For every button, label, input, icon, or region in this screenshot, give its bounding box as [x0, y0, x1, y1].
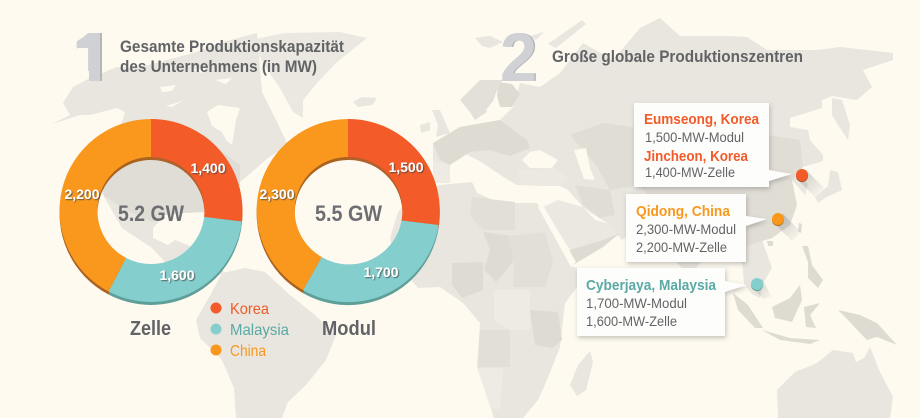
Iberia: [433, 160, 450, 183]
segment: China: [257, 119, 348, 290]
callout: Malaysia: Cyberjaya, Malaysia: [586, 277, 717, 294]
callout: China: Qidong, China: [636, 203, 731, 220]
Yemen and Oman: [570, 233, 620, 265]
donut total: 5.5 GW: 5.5 GW: [315, 201, 382, 226]
Hudson Bay: [207, 105, 240, 145]
Philippines: [802, 246, 823, 288]
Iran: [575, 185, 615, 218]
value labels: 1,500: [388, 159, 424, 175]
East Asia: [640, 135, 803, 248]
Baltic Sea: [486, 96, 508, 118]
Borneo: [772, 285, 802, 322]
value labels: 1,400: [190, 160, 226, 176]
Australia: [777, 347, 893, 418]
value labels: [259, 159, 424, 280]
Sulawesi: [804, 303, 820, 328]
marker: China: [772, 213, 801, 241]
value labels: 1,600: [159, 267, 195, 283]
Ireland: [420, 122, 430, 133]
section 2 heading: Große globale Produktionszentren: [552, 48, 803, 66]
Japan: [815, 170, 842, 203]
callout: Korea: Jincheon, Korea: [644, 148, 749, 165]
Kamchatka: [832, 98, 850, 140]
Black Sea: [522, 150, 558, 168]
callout: Malaysia: 1,600-MW-Zelle: [586, 313, 677, 329]
Greenland: [250, 32, 367, 118]
United States: [100, 140, 240, 222]
Red Sea: [538, 207, 576, 267]
callout: Malaysia: 1,700-MW-Modul: [586, 295, 687, 311]
donut total: 5.2 GW: 5.2 GW: [118, 201, 184, 226]
callout: Korea: 1,400-MW-Zelle: [645, 164, 735, 180]
Turkey: [517, 168, 568, 186]
segment: Korea: [151, 119, 242, 222]
callout: Malaysia: [577, 268, 747, 336]
marker: Korea: [796, 169, 824, 197]
segment: Malaysia: [108, 217, 242, 302]
section 2 numeral: 2: [500, 19, 537, 96]
legend: [210, 301, 289, 360]
Madagascar: [570, 351, 593, 396]
North America: [52, 33, 288, 280]
label: Zelle: Zelle: [130, 318, 171, 340]
donut chart: Modul: [257, 119, 440, 305]
Russia lighter band removed; Arabia: [543, 200, 620, 265]
Eurasia: [433, 18, 893, 298]
marker: Malaysia: [751, 278, 772, 299]
New Guinea: [838, 310, 897, 345]
Europe countries: [433, 120, 530, 165]
segment: Korea: [348, 119, 440, 225]
callout: China: 2,200-MW-Zelle: [636, 239, 727, 255]
value labels: 2,200: [64, 186, 100, 202]
legend item: China: China: [230, 343, 266, 360]
Africa: [390, 182, 590, 418]
Africa countries: [483, 232, 513, 282]
Taiwan: [798, 223, 802, 233]
Java: [762, 330, 820, 344]
legend item: Malaysia: Malaysia: [230, 322, 289, 339]
label: Modul: Modul: [322, 318, 376, 340]
segment: China: [60, 119, 151, 292]
donut chart: Zelle: [60, 119, 242, 305]
section 1 heading: [120, 38, 344, 76]
British Isles: [432, 110, 450, 137]
callout: Korea: 1,500-MW-Modul: [645, 129, 744, 145]
callout: Korea: Eumseong, Korea: [644, 111, 760, 128]
section 1 heading: des Unternehmens (in MW): [120, 58, 317, 76]
segment: Malaysia: [303, 220, 439, 302]
Iceland: [353, 97, 377, 107]
Svalbard: [475, 36, 503, 48]
value labels: 2,300: [259, 186, 295, 202]
section 1 numeral: 1: [72, 19, 110, 96]
Arctic channels: [160, 68, 232, 107]
South America: [196, 268, 336, 418]
callout: China: 2,300-MW-Modul: [636, 221, 736, 237]
Central Asia: [570, 123, 640, 190]
Caspian Sea: [574, 148, 595, 180]
callout: China: [626, 194, 767, 262]
Hainan: [767, 241, 773, 246]
legend item: Korea: Korea: [230, 301, 269, 318]
Sumatra: [733, 293, 763, 328]
section 1 heading: Gesamte Produktionskapazität: [120, 38, 344, 56]
value labels: 1,700: [363, 264, 399, 280]
callout: Korea: [634, 103, 792, 187]
value labels: [64, 160, 226, 283]
section 1 numeral: [76, 33, 102, 81]
Novaya Zemlya: [530, 20, 586, 48]
